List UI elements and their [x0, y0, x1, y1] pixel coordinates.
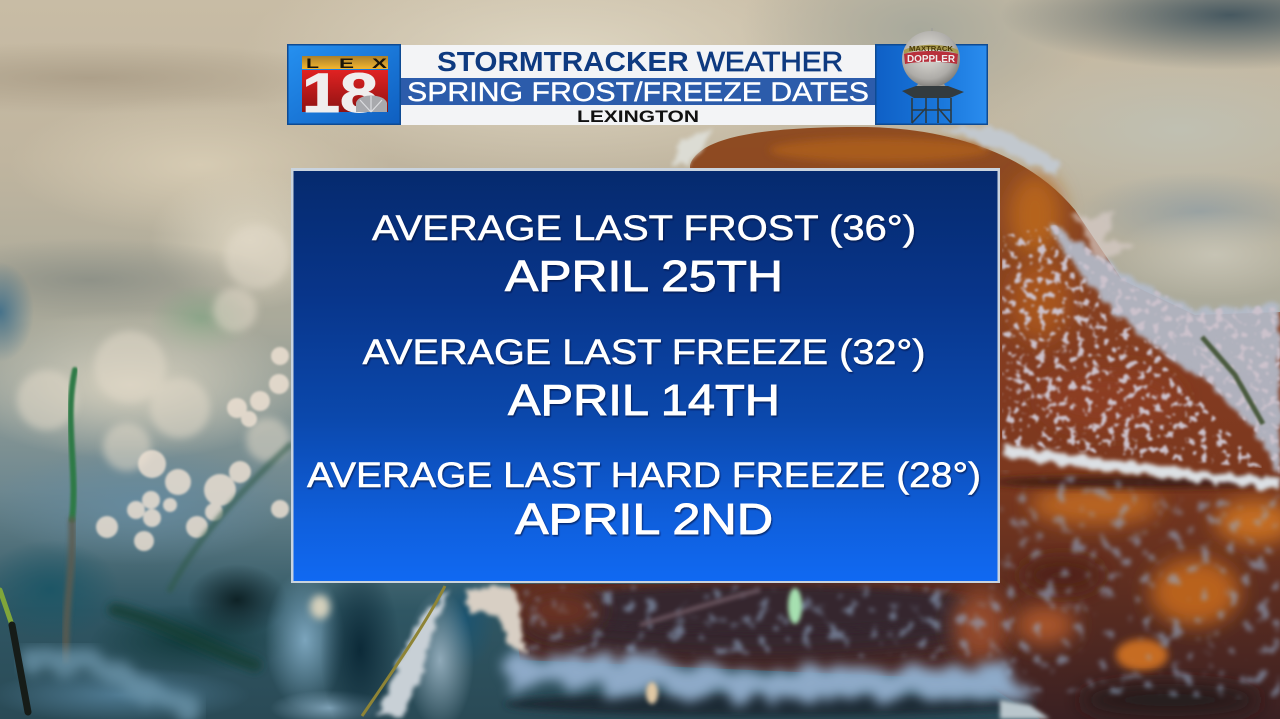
location: Lexington: LEXINGTON [577, 107, 699, 126]
panel background [291, 168, 1000, 583]
last hard freeze heading: AVERAGE LAST HARD FREEZE (28°) [307, 456, 981, 495]
subtitle: Spring Frost/Freeze Dates: SPRING FROST/FREEZE DATES [407, 77, 869, 107]
frost edges [310, 128, 1280, 719]
last freeze date: APRIL 14TH [508, 376, 780, 425]
subtitle bar [401, 78, 875, 105]
icon: LEX 18 station logo: L [306, 55, 320, 71]
icon: LEX 18 station logo: E [339, 55, 354, 71]
last frost heading: AVERAGE LAST FROST (36°) [372, 209, 916, 248]
header banner [287, 28, 988, 126]
last hard freeze date: APRIL 2ND [515, 495, 773, 544]
weather panel [291, 168, 1000, 583]
icon: Doppler radar tower: MAXTRACK [909, 46, 953, 53]
title: Stormtracker Weather: STORMTRACKER WEATHER [437, 46, 843, 77]
frosted leaf [505, 127, 1280, 719]
icon: LEX 18 station logo [287, 44, 401, 125]
last frost date: APRIL 25TH [505, 252, 783, 301]
icon: Doppler radar tower: DOPPLER [907, 54, 956, 65]
white title bar [401, 45, 875, 125]
bokeh highlights and grass [0, 225, 290, 712]
last freeze heading: AVERAGE LAST FREEZE (32°) [362, 333, 926, 372]
icon: Doppler radar tower [875, 28, 988, 125]
icon: LEX 18 station logo: 18 [302, 61, 378, 124]
icon: LEX 18 station logo: X [372, 55, 388, 71]
